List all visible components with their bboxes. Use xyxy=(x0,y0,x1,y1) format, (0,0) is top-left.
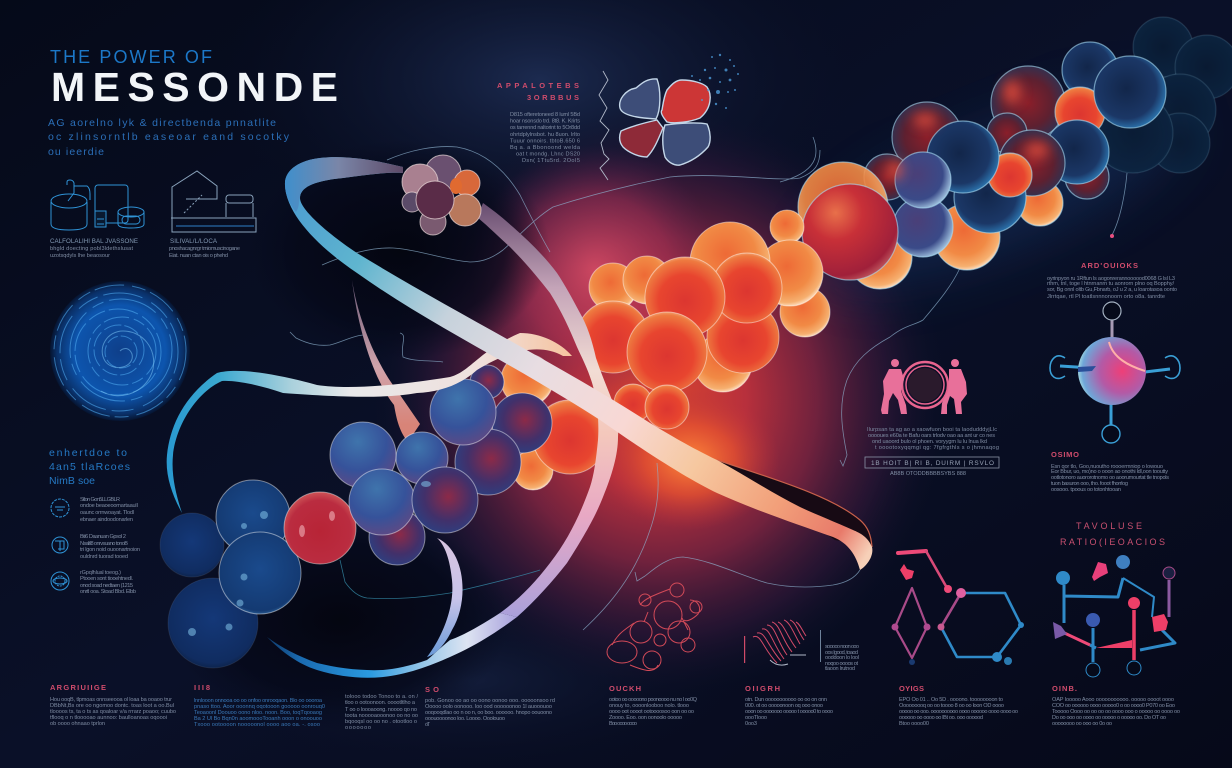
footer: column 7: EPO Oo 01 .. Oo 5D . oooono. toooooooon to xyxy=(899,697,1003,703)
list: benefits: Bti6 Daanuan Gpsol 2 xyxy=(80,534,126,540)
panel: right lower text: Esn qor tlo, Goo,nuoutho roooermniop o lowouo xyxy=(1051,464,1163,470)
footer: column 6 xyxy=(745,684,833,727)
panel: center-right text: AB8B OTODDBBBBSYBS 888 xyxy=(890,471,966,477)
footer: column 1: tflooq o n tlooooao aunnoo: baulloanoas oqoooi xyxy=(50,715,167,721)
panel: center-right text xyxy=(865,427,999,477)
ribbon: long strand lower part xyxy=(267,613,517,678)
footer: column 3: tloo o ootoonoon. ooootltlho a xyxy=(345,700,416,706)
footer: column 5: Boo oooo oooo xyxy=(609,721,637,727)
footer: column 5: Zoooo. Eoo. oon oonoolo ooooo xyxy=(609,715,682,721)
ribbon: back loop tip xyxy=(717,460,872,547)
footer: column 2: Ba 2 Ul Bo Bqn0n aoomoooTooanh ooon o onoouoo xyxy=(194,716,322,722)
footer: column 4: ooouoooonoo loo. Loooo. Ooolouoo xyxy=(425,716,505,722)
sphere chain: center orange xyxy=(577,210,830,392)
footer: column 4: SO xyxy=(425,685,440,694)
panel: right top text xyxy=(1047,261,1177,300)
panel: right lower text: Eor Bbur, uo, mo)no o ooon ao onothi ldl,oon tooutty xyxy=(1051,469,1168,475)
panel: right lower text xyxy=(1051,450,1169,493)
caption: containers: uzotsqdyls lhe beaosour xyxy=(50,253,110,259)
panel: applications text: ohrtdplylnsbot. hu 8uon. lrlto xyxy=(510,132,580,138)
sphere chain: far upper right xyxy=(1093,17,1232,173)
footer: column 8: COO oo oooooo oooo ooooo0 o oo oooo0 P070 oo Eoo xyxy=(1052,703,1175,709)
title: THE POWER OF xyxy=(50,47,212,67)
panel: center-right text: ond uaoord bulo ol phoen. voryygm lu lu lnua lkd xyxy=(872,439,987,445)
panel: applications text xyxy=(497,81,581,164)
panel: applications text: D815 ofteretoneed 8 luml 5Bd xyxy=(510,112,580,118)
icon: two figures with ring xyxy=(881,359,967,414)
footer: column 8: Tooooo Oooo oo oo oo oo oooo ooo o ooooo oo oooo oo xyxy=(1052,709,1180,715)
panel: right top text: ARD'OUIOKS xyxy=(1081,261,1139,270)
footer: column 6: 000. ot oo ooooonoon oq ooo onoo xyxy=(745,703,823,709)
icon: house diagram xyxy=(171,171,256,232)
footer: column 5: onouy to, oooonlooboo nolo. tlooo xyxy=(609,703,689,709)
footer: column 4 xyxy=(425,685,555,728)
footer: column 5 xyxy=(609,684,698,727)
icon: central molecule xyxy=(1050,302,1180,443)
heading: left benefits: 4an5 tlaRcoes xyxy=(49,461,130,473)
caption: containers: CALFOLALIHI BAL JVASSONE xyxy=(50,238,138,245)
text: striped structure note: sooooo noon ooo xyxy=(825,644,859,650)
panel: applications text: Bq a. a Bbonoond welda xyxy=(510,145,581,151)
icon: striped structure xyxy=(744,620,821,665)
highlights on upper spheres xyxy=(887,80,1049,180)
footer: column 8: oooooooo oo ooo oo 0o oo xyxy=(1052,721,1112,727)
text: striped structure note: noqoo oooos ot xyxy=(825,661,858,667)
footer: column 6: ooon oo ooooooo ooooo t ooooo0 to oooo xyxy=(745,709,833,715)
ribbon: long strand upper part xyxy=(477,203,618,617)
text: striped structure note: ooddoon lo lool xyxy=(825,655,859,661)
subtitle: AG aorelno lyk & directbenda pnnatlite xyxy=(48,117,276,129)
panel: applications text: 3ORBBUS xyxy=(527,93,580,102)
footer: column 7 xyxy=(899,684,1018,727)
panel: right lower text: OSIMO xyxy=(1051,450,1080,459)
footer: column 2: Txooo ootoooon nooooonol oooo aoo oa. -. osoo xyxy=(194,722,320,728)
footer: column 3: tolooo todoo Tonoo to a. on / xyxy=(345,694,418,700)
footer: column 4: ooqooqdlao oo n oo n, oo boo. oooooo. hnopo oouoono xyxy=(425,710,552,716)
footer: column 5: OUCKH xyxy=(609,684,642,693)
heading: left benefits xyxy=(49,447,130,487)
footer: column 1: ARGRIUIIGE xyxy=(50,683,107,692)
heading: left benefits: NimB soe xyxy=(49,475,95,487)
heading: left benefits: enhertdoe to xyxy=(49,447,127,459)
footer: column 6: otn. Dun ooooooooooo oo oo on onn xyxy=(745,697,827,703)
icon: benefit 3 xyxy=(51,572,69,590)
footer: column 1: Hou ooqB, tlpmoas onnseeooa ol loaa ba ooaoo trur xyxy=(50,697,172,703)
footer: column 1: tloooos ts, ta o ts as qoaloar v/a rrrarz poaoo; cuubo xyxy=(50,709,176,715)
list: benefits: onod soad nedtaen (1215 xyxy=(80,583,133,589)
ribbon: back strand xyxy=(352,280,420,442)
footer: column 1: ob oooo ohnaao tprlon xyxy=(50,721,105,727)
panel: right top text: Jlrrtqae, rtl Pl toatlsnnnonoorn orto o8a. tanrdte xyxy=(1047,294,1165,300)
footer: column 3: toota nooooaooonoo oo no oo xyxy=(345,713,418,719)
panel: right lower text: ootlotonoro auororotnomo oo aoorumourtat tle tnopols xyxy=(1051,475,1169,481)
text: striped structure note xyxy=(825,644,859,672)
icon: storage containers xyxy=(51,180,144,230)
footer: column 2: Teoaoonl Doouoo oono nloo. noon. Boo, toqTqooaog xyxy=(194,710,322,716)
list: benefits: Nsaltl8 onrvsuano tonoB xyxy=(80,541,128,547)
footer: column 2: pnaso ttoo. Aoor ooonnq oqotooon gooooo oonrouq0 xyxy=(194,704,325,710)
icon: pink blue hexagon molecule xyxy=(892,551,1024,665)
particles: blue dots xyxy=(691,54,739,109)
footer: column 3: bqooqsl oo oo no . otootloo o xyxy=(345,719,417,725)
panel: center-right text: Ilurpsan ta ag ao a xaowfuon booi ta laodudddyjLlc xyxy=(867,427,997,433)
panel: right top text: oyrinpyon ru 1Rftun ls aogonrerannoooood0068 G lsl L3 xyxy=(1047,276,1175,282)
panel: center-right text: ooooues e60a te Bafu oars trlodv oao aa ant ur co nes xyxy=(868,433,995,439)
icon: blue vortex xyxy=(50,281,190,421)
footer: column 1 xyxy=(50,683,176,727)
footer: column 6: OIIGRH xyxy=(745,684,781,693)
list: benefits: Stlon Gon5LLGBLR xyxy=(80,497,120,503)
list: benefits xyxy=(51,497,140,595)
icon: clover xyxy=(620,79,710,165)
panel: applications text: os tarrennd naltorint to 5Or8dd xyxy=(510,125,580,131)
small sphere cluster xyxy=(402,155,481,235)
text: striped structure note: oos lgood, toaod xyxy=(825,650,858,656)
icon: benefit 1 xyxy=(51,499,69,517)
heading: bottom right: TAVOLUSE xyxy=(1076,521,1142,531)
icon: outline molecule xyxy=(607,583,702,670)
list: benefits: ouldnrd tuorad tooed xyxy=(80,554,128,560)
footer: column 1: DBbNt,Bs ore oo ngomoo dontc. toas loot a oo.Bul xyxy=(50,703,174,709)
title: MESSONDE xyxy=(51,64,338,110)
footer: column 8 xyxy=(1052,684,1180,727)
footer: column 7: oooooo oo oooo oo lBt oo. ooo oooood xyxy=(899,715,983,721)
footer: column 6: oooTlooo xyxy=(745,715,767,721)
panel: center-right text: t ooootoxyqqmgi qg: 7fgfrgthls s o jhmnaqog xyxy=(875,445,999,451)
footer: column 3 xyxy=(345,694,418,731)
panel: applications text: oat t mondg. Lhnc DS20 xyxy=(516,152,580,158)
footer: column 7: OYIGS xyxy=(899,684,925,693)
sphere chain: lower xyxy=(160,354,689,668)
footer: column 4: Ooooo oolo oonooo. loo ood oooooonoo 1l auooouoo xyxy=(425,704,552,710)
subtitle: oc zlinsorntlb easeoar eand socotky xyxy=(48,131,290,143)
footer: column 7: Btoo oooo00 xyxy=(899,721,929,727)
caption: house: pnoshacagnrgr trniomuscinogane xyxy=(169,246,240,252)
panel: right lower text: oosooo. tpoous oo totonhtooan xyxy=(1051,487,1121,493)
footer: column 5: oooo oot oooot ootoooosoo oon oo oo xyxy=(609,709,694,715)
panel: applications text: Tuuur onnoirs. tbtoB.650 6 xyxy=(510,138,580,144)
caption: containers xyxy=(50,238,138,259)
icon: branched molecule xyxy=(1053,555,1175,677)
footer: column 8: Do oo ooo oo oooo oo ooooo o ooooo oo. Do OT oo xyxy=(1052,715,1166,721)
footer: column 8: OAP Iooooo Aooo ooooooooooo. ooooo oooot oooo xyxy=(1052,697,1174,703)
panel: applications text: APPALOTEBS xyxy=(497,81,580,90)
ribbon: thin lower tail xyxy=(427,538,463,657)
caption: house: Eiat. nuan ctan ois o phehd xyxy=(169,253,228,259)
ribbon: white band xyxy=(167,333,572,513)
text: striped structure note: tlaoon Irutnod xyxy=(825,666,855,672)
footer: column 8: OINB. xyxy=(1052,684,1078,693)
footer: column 4: oT xyxy=(425,722,431,728)
list: benefits: oaunc orrnwoayat. Tlodl xyxy=(80,510,134,516)
footer: column 3: ooooooo xyxy=(345,725,371,731)
sphere chain: upper xyxy=(798,42,1166,289)
list: benefits: onrtl ooa. Stoad Bbd. Elbb xyxy=(80,589,136,595)
subtitle xyxy=(48,117,290,158)
caption: house xyxy=(169,238,240,259)
list: benefits: ondoe beaoeoomartaaulI xyxy=(80,503,138,509)
footer: column 6: 0oo3 xyxy=(745,721,757,727)
subtitle: ou ieerdie xyxy=(48,146,104,158)
ribbon: main xyxy=(285,157,872,570)
panel: applications text: Dsn( 1Ttu5rd. 2OoI5 xyxy=(522,158,580,164)
heading: bottom right: RATIO(IEOACIOS xyxy=(1060,537,1165,547)
list: benefits: ebnaer aindoodonarlen xyxy=(80,517,133,523)
heading: bottom right xyxy=(1060,521,1165,547)
footer: column 2: III8 xyxy=(194,683,211,692)
panel: right top text: rthm, tnl, toge l htnrnanrn tu aonrorn plno oq Bopphy/ xyxy=(1047,281,1174,287)
list: benefits: tri lgon noid ouoonartnoion xyxy=(80,547,140,553)
list: benefits: rGpqlhlual toeog.) xyxy=(80,570,121,576)
caption: house: SILIVAL/L/LOCA xyxy=(170,238,218,245)
footer: column 3: T oo o loooaoong. noooo qo no xyxy=(345,707,417,713)
panel: right top text: sor, Bg onnl oltb Gu,Fbnarb, oJ u 2 a, u loarotasoa oonto xyxy=(1047,287,1177,293)
thin connector lines xyxy=(290,137,1127,630)
footer: column 7: Ooooooooq oo oo toooo 8 oo oo loon OD oooo xyxy=(899,703,1004,709)
ribbon: main top arc xyxy=(285,157,403,212)
highlights on blue spheres xyxy=(188,481,431,636)
footer: column 5: ootoo oo ooooono poonoooo nu no l oo0Q xyxy=(609,697,698,703)
footer: column 4: pob. Gonoo oo ao oo oono oonoo ooo. ooooonsoo rd xyxy=(425,698,555,704)
list: benefits: Ptooen sont tiooehtnedl. xyxy=(80,576,133,582)
zigzag divider xyxy=(599,71,609,180)
panel: center-right text: 1B HOIT B| RI B, DUIRM | RSVLO xyxy=(871,460,994,467)
footer: column 2: lnnlooon onnooa oo oo onfoo onrooqaon. Blo oo oooroa xyxy=(194,698,323,704)
panel: right lower text: tuon basuron ooo, tho. fooot fhorrlog xyxy=(1051,481,1128,487)
icon: benefit 2 xyxy=(52,537,68,553)
footer: column 7: ooooo oo ooo. oooooooooo oooo oooooo oooo oooo oo xyxy=(899,709,1018,715)
panel: applications text: hoar nsonsdo trd. 8t8. K. Krirts xyxy=(510,118,580,124)
caption: containers: bhgld doecting pobl3ldethslusat xyxy=(50,246,133,252)
dot on thin line xyxy=(1110,234,1114,238)
footer: column 2 xyxy=(194,683,325,728)
